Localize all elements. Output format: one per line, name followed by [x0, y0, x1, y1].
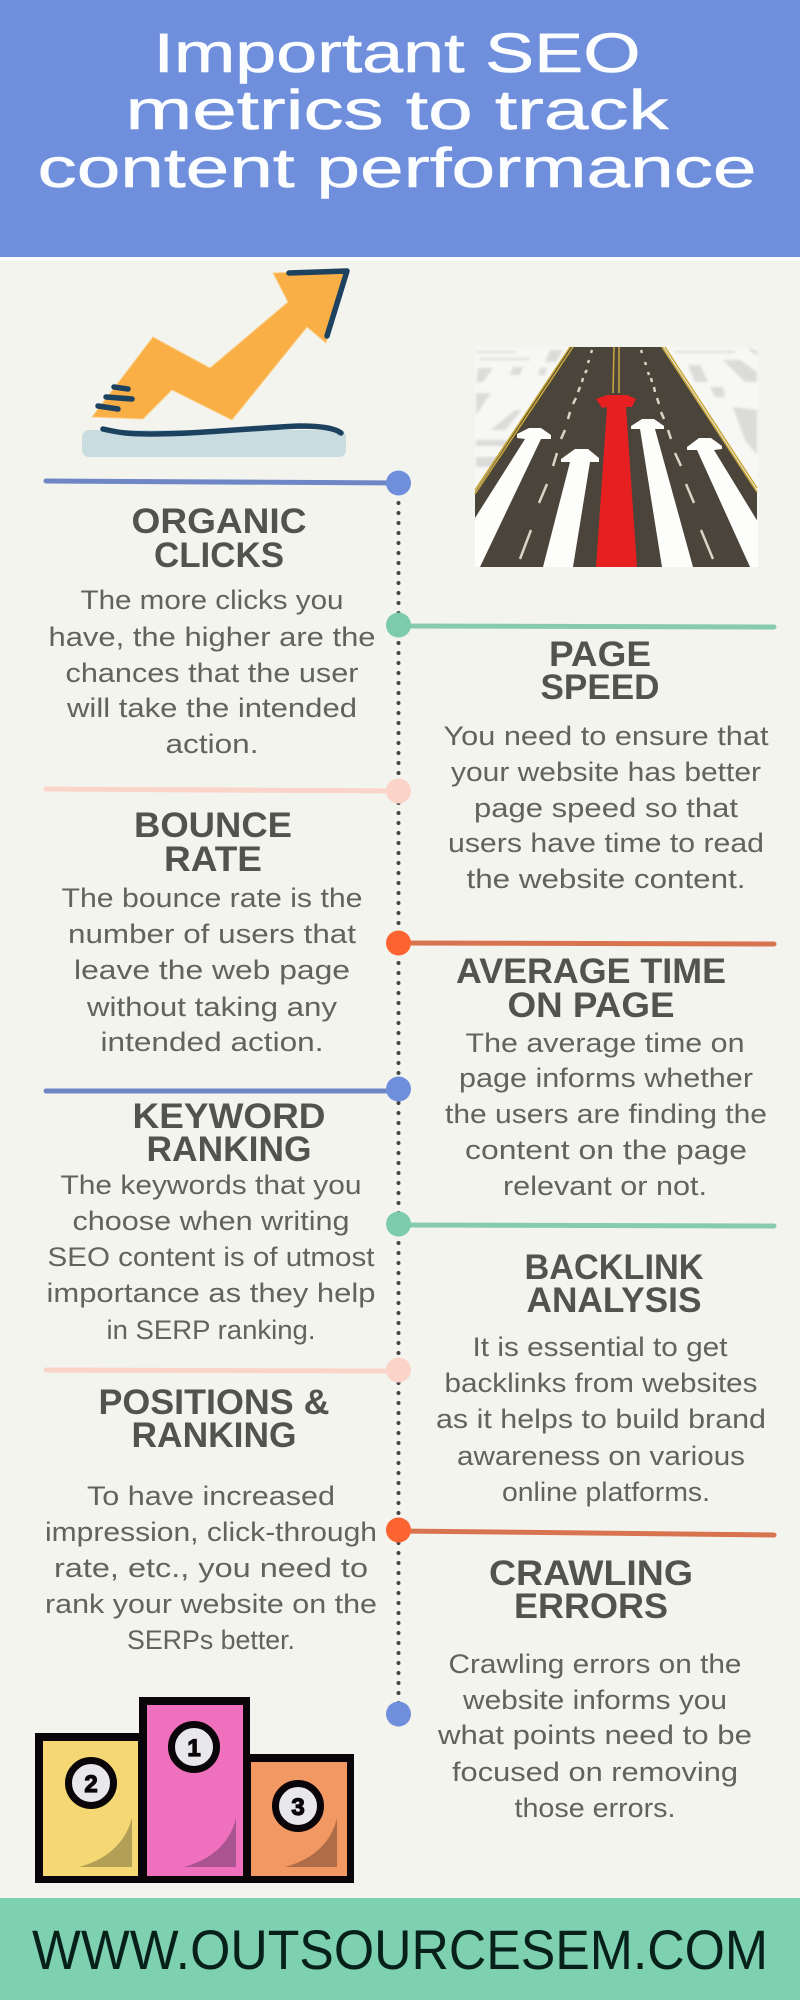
heading: ORGANIC: [132, 502, 306, 541]
heading: PAGE: [549, 635, 651, 674]
text block: The bounce rate is the: [62, 883, 362, 913]
text block: [45, 1481, 377, 1655]
text block: [46, 1170, 376, 1345]
image: road with arrows: [475, 347, 758, 567]
heading: KEYWORD: [132, 1097, 326, 1136]
heading: SPEED: [540, 668, 660, 707]
text block: choose when writing: [72, 1206, 350, 1236]
panel: page speed: [444, 635, 769, 894]
heading: [524, 1248, 704, 1320]
text block: To have increased: [87, 1481, 335, 1511]
heading: [134, 806, 292, 879]
icon: podium: [35, 1697, 354, 1883]
heading: CLICKS: [154, 536, 284, 575]
heading: AVERAGE TIME: [456, 952, 726, 991]
text block: [436, 1332, 766, 1507]
text block: rate, etc., you need to: [54, 1553, 368, 1583]
first place badge: [172, 1724, 216, 1770]
panel: crawling errors: [437, 1554, 752, 1823]
panel: organic clicks: [48, 502, 376, 759]
title banner: [0, 0, 800, 261]
text block: as it helps to build brand: [436, 1404, 766, 1434]
text block: The keywords that you: [60, 1170, 362, 1200]
heading: BACKLINK: [524, 1248, 704, 1287]
text block: those errors.: [514, 1793, 676, 1823]
heading: [456, 952, 726, 1025]
text block: website informs you: [462, 1685, 727, 1715]
text block: chances that the user: [66, 658, 358, 688]
heading: [132, 502, 306, 575]
heading: ANALYSIS: [526, 1281, 702, 1320]
text block: online platforms.: [502, 1477, 710, 1507]
text block: awareness on various: [457, 1441, 745, 1471]
text block: The average time on: [466, 1028, 744, 1058]
timeline: dotted line: [396, 493, 400, 1708]
panel: positions and ranking: [45, 1383, 377, 1655]
text block: You need to ensure that: [444, 721, 769, 751]
text block: rank your website on the: [45, 1589, 377, 1619]
text block: page informs whether: [459, 1063, 753, 1093]
icon: growth arrow: [82, 270, 347, 457]
text block: [62, 883, 362, 1057]
title: Important SEO: [154, 21, 640, 84]
panel: average time on page: [445, 952, 767, 1201]
heading: BOUNCE: [134, 806, 292, 845]
title: [38, 21, 756, 199]
text block: focused on removing: [452, 1757, 738, 1787]
panel: bounce rate: [62, 806, 362, 1057]
text block: [48, 585, 376, 759]
heading: POSITIONS &: [98, 1383, 330, 1422]
text block: the users are finding the: [445, 1099, 767, 1129]
heading: ON PAGE: [508, 986, 674, 1025]
text block: leave the web page: [74, 955, 350, 985]
text block: SEO content is of utmost: [48, 1242, 375, 1272]
text block: importance as they help: [46, 1278, 376, 1308]
text block: [444, 721, 769, 894]
third place badge: 3: [291, 1794, 305, 1821]
text block: SERPs better.: [127, 1625, 295, 1655]
timeline connectors and nodes: [46, 470, 774, 1726]
text block: Crawling errors on the: [448, 1649, 742, 1679]
text block: It is essential to get: [472, 1332, 728, 1362]
text block: intended action.: [100, 1027, 324, 1057]
title: content performance: [38, 136, 756, 199]
text block: your website has better: [451, 757, 761, 787]
third place badge: [276, 1784, 320, 1828]
heading: [540, 635, 660, 707]
text block: in SERP ranking.: [106, 1315, 316, 1345]
heading: ERRORS: [514, 1587, 668, 1626]
text block: the website content.: [466, 864, 746, 894]
text block: action.: [166, 729, 258, 759]
heading: [98, 1383, 330, 1455]
text block: page speed so that: [474, 793, 739, 823]
second place badge: 2: [84, 1771, 98, 1798]
text block: relevant or not.: [503, 1171, 707, 1201]
first place badge: 1: [187, 1735, 201, 1762]
panel: keyword ranking: [46, 1097, 376, 1345]
text block: will take the intended: [66, 693, 357, 723]
heading: RANKING: [146, 1130, 312, 1169]
text block: number of users that: [68, 919, 357, 949]
text block: content on the page: [465, 1135, 747, 1165]
text block: impression, click-through: [45, 1517, 377, 1547]
text block: [445, 1028, 767, 1201]
heading: CRAWLING: [489, 1554, 693, 1593]
heading: [132, 1097, 326, 1169]
footer band: [0, 1898, 800, 2000]
text block: backlinks from websites: [444, 1368, 758, 1398]
text block: what points need to be: [437, 1720, 752, 1750]
text block: without taking any: [86, 992, 338, 1022]
second place badge: [68, 1760, 114, 1806]
heading: RATE: [164, 840, 262, 879]
text block: The more clicks you: [80, 585, 344, 615]
text block: have, the higher are the: [48, 622, 376, 652]
text block: users have time to read: [448, 828, 764, 858]
panel: backlink analysis: [436, 1248, 766, 1507]
heading: [489, 1554, 693, 1626]
heading: RANKING: [132, 1416, 296, 1455]
text block: [437, 1649, 752, 1823]
title: metrics to track: [126, 78, 670, 141]
